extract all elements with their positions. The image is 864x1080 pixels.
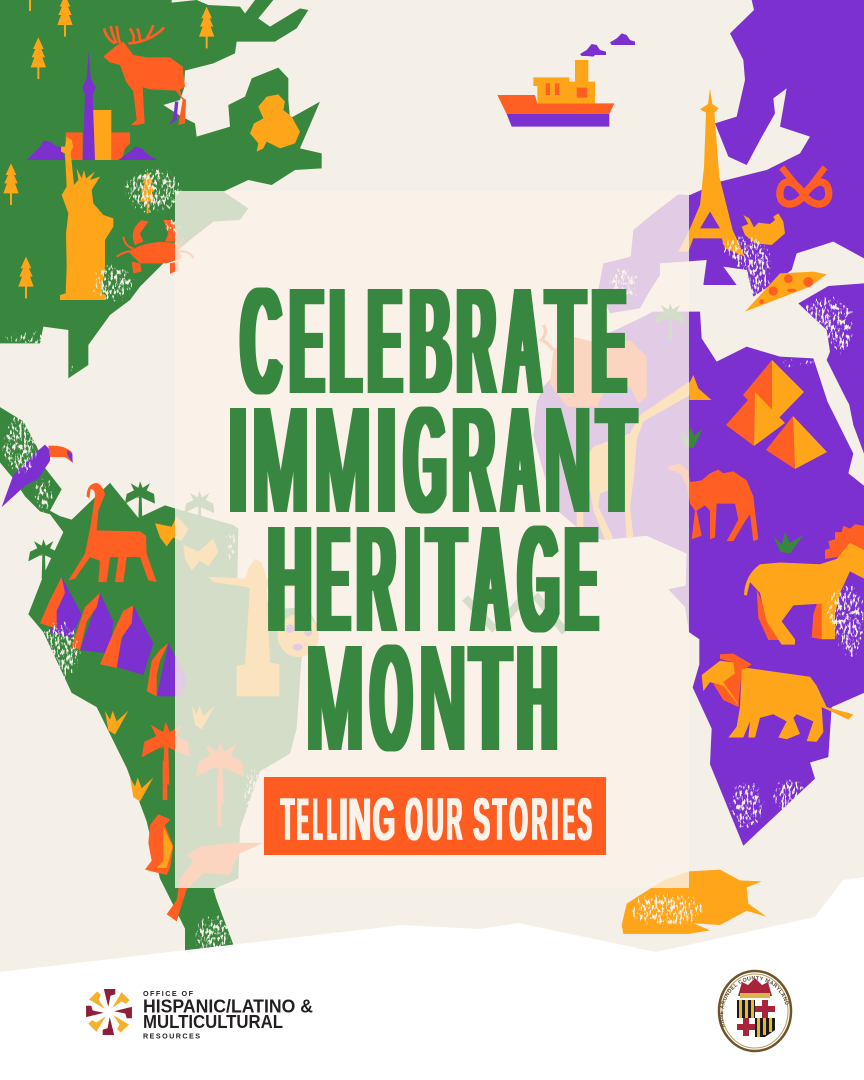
title: N [545, 374, 591, 546]
title: C [241, 255, 281, 427]
map: North Africa [537, 312, 827, 402]
title: I [406, 493, 419, 665]
logo text: OFFICE OF [143, 989, 194, 998]
plant under panel near heading [465, 590, 565, 632]
icon: grass tufts [680, 427, 803, 554]
icon: squirrel [250, 94, 300, 152]
seal crown [738, 978, 772, 996]
icon: penguin [145, 814, 173, 875]
icon: butterflies [155, 516, 218, 571]
subtitle badge: N [348, 786, 371, 853]
title: E [318, 493, 349, 665]
icon: giraffe head [689, 375, 713, 405]
icon: pretzel [780, 167, 829, 204]
subtitle badge: I [339, 786, 348, 853]
map: Africa [533, 400, 864, 934]
icon: standing lion [744, 524, 864, 645]
title: M [306, 612, 364, 784]
title: O [371, 612, 411, 784]
title: I [230, 374, 246, 546]
title: T [428, 493, 465, 665]
text: T [598, 374, 635, 546]
title: M [252, 374, 308, 546]
icon: sloth face [278, 614, 319, 657]
icon: toucan [2, 445, 73, 507]
map: Asia fragment [798, 283, 864, 430]
title: H [268, 493, 311, 665]
icon: pyramids [726, 360, 827, 469]
title: B [410, 255, 451, 427]
icon: Madagascar-shaped yellow island [622, 870, 767, 934]
logo text: MULTICULTURAL [143, 1012, 283, 1032]
icon: palms [28, 481, 214, 579]
title: L [330, 255, 360, 427]
map: North America [0, 0, 322, 378]
icon: hidden giraffe and camel under panel [542, 303, 690, 540]
title: E [290, 255, 323, 427]
subtitle badge: T [493, 786, 506, 853]
icon: Christ the Redeemer [208, 559, 293, 696]
title: E [566, 493, 597, 665]
title: I [378, 374, 395, 546]
subtitle badge: S [578, 786, 592, 853]
icon: monkey [68, 483, 157, 582]
title [230, 255, 635, 784]
seal shield [737, 1000, 775, 1037]
title: A [504, 255, 541, 427]
icon: yellow sprouts [105, 705, 215, 801]
subtitle badge: O [405, 786, 423, 853]
subtitle badge: S [473, 786, 490, 853]
distressed texture on maps [0, 164, 864, 959]
icon: camel [668, 464, 758, 541]
title: A [502, 374, 538, 546]
subtitle badge [264, 777, 606, 855]
icon: city skyline with tower [27, 50, 157, 160]
title: N [420, 612, 466, 784]
title: G [404, 374, 446, 546]
title: A [472, 493, 509, 665]
county seal: ANNE ARUNDEL COUNTY MARYLAND [719, 976, 789, 1028]
subtitle badge: E [297, 786, 309, 853]
subtitle badge: U [427, 786, 444, 853]
logo: pinwheel [86, 989, 132, 1035]
subtitle badge: T [281, 786, 294, 853]
icon: eiffel tower [678, 88, 745, 257]
icon: statue of liberty [60, 137, 113, 300]
subtitle badge: L [313, 786, 322, 853]
title: M [314, 374, 370, 546]
icon: orange palms [142, 722, 244, 827]
logo text [143, 989, 313, 1040]
trees [3, 0, 214, 298]
subtitle badge: I [552, 786, 558, 853]
subtitle badge: G [373, 786, 395, 853]
icon: crab [117, 220, 193, 274]
logo text: HISPANIC/LATINO & [143, 996, 313, 1016]
subtitle badge: E [563, 786, 575, 853]
icon: smoke clouds [580, 33, 635, 57]
map: Europe [537, 0, 864, 430]
icon: mountains [40, 577, 187, 696]
icon: pizza slice [745, 272, 827, 312]
title: G [519, 493, 559, 665]
title: T [547, 255, 584, 427]
title: R [457, 255, 495, 427]
icon: dolphin [167, 843, 263, 921]
subtitle badge: R [532, 786, 547, 853]
title: E [368, 255, 401, 427]
panel: translucent cream card [175, 191, 689, 888]
title: T [471, 612, 510, 784]
icon: moose [103, 25, 186, 125]
title: R [453, 374, 494, 546]
title: H [517, 612, 557, 784]
subtitle badge: L [327, 786, 336, 853]
map: South America [0, 407, 319, 952]
logo text: RESOURCES [143, 1032, 200, 1040]
county seal [718, 970, 792, 1052]
icon: ship [497, 33, 635, 127]
text: E [592, 255, 625, 427]
icon: croissant [742, 213, 785, 245]
subtitle badge: R [447, 786, 462, 853]
title: R [357, 493, 395, 665]
icon: lion [702, 654, 853, 742]
footer band [0, 877, 864, 1080]
subtitle badge: O [509, 786, 528, 853]
